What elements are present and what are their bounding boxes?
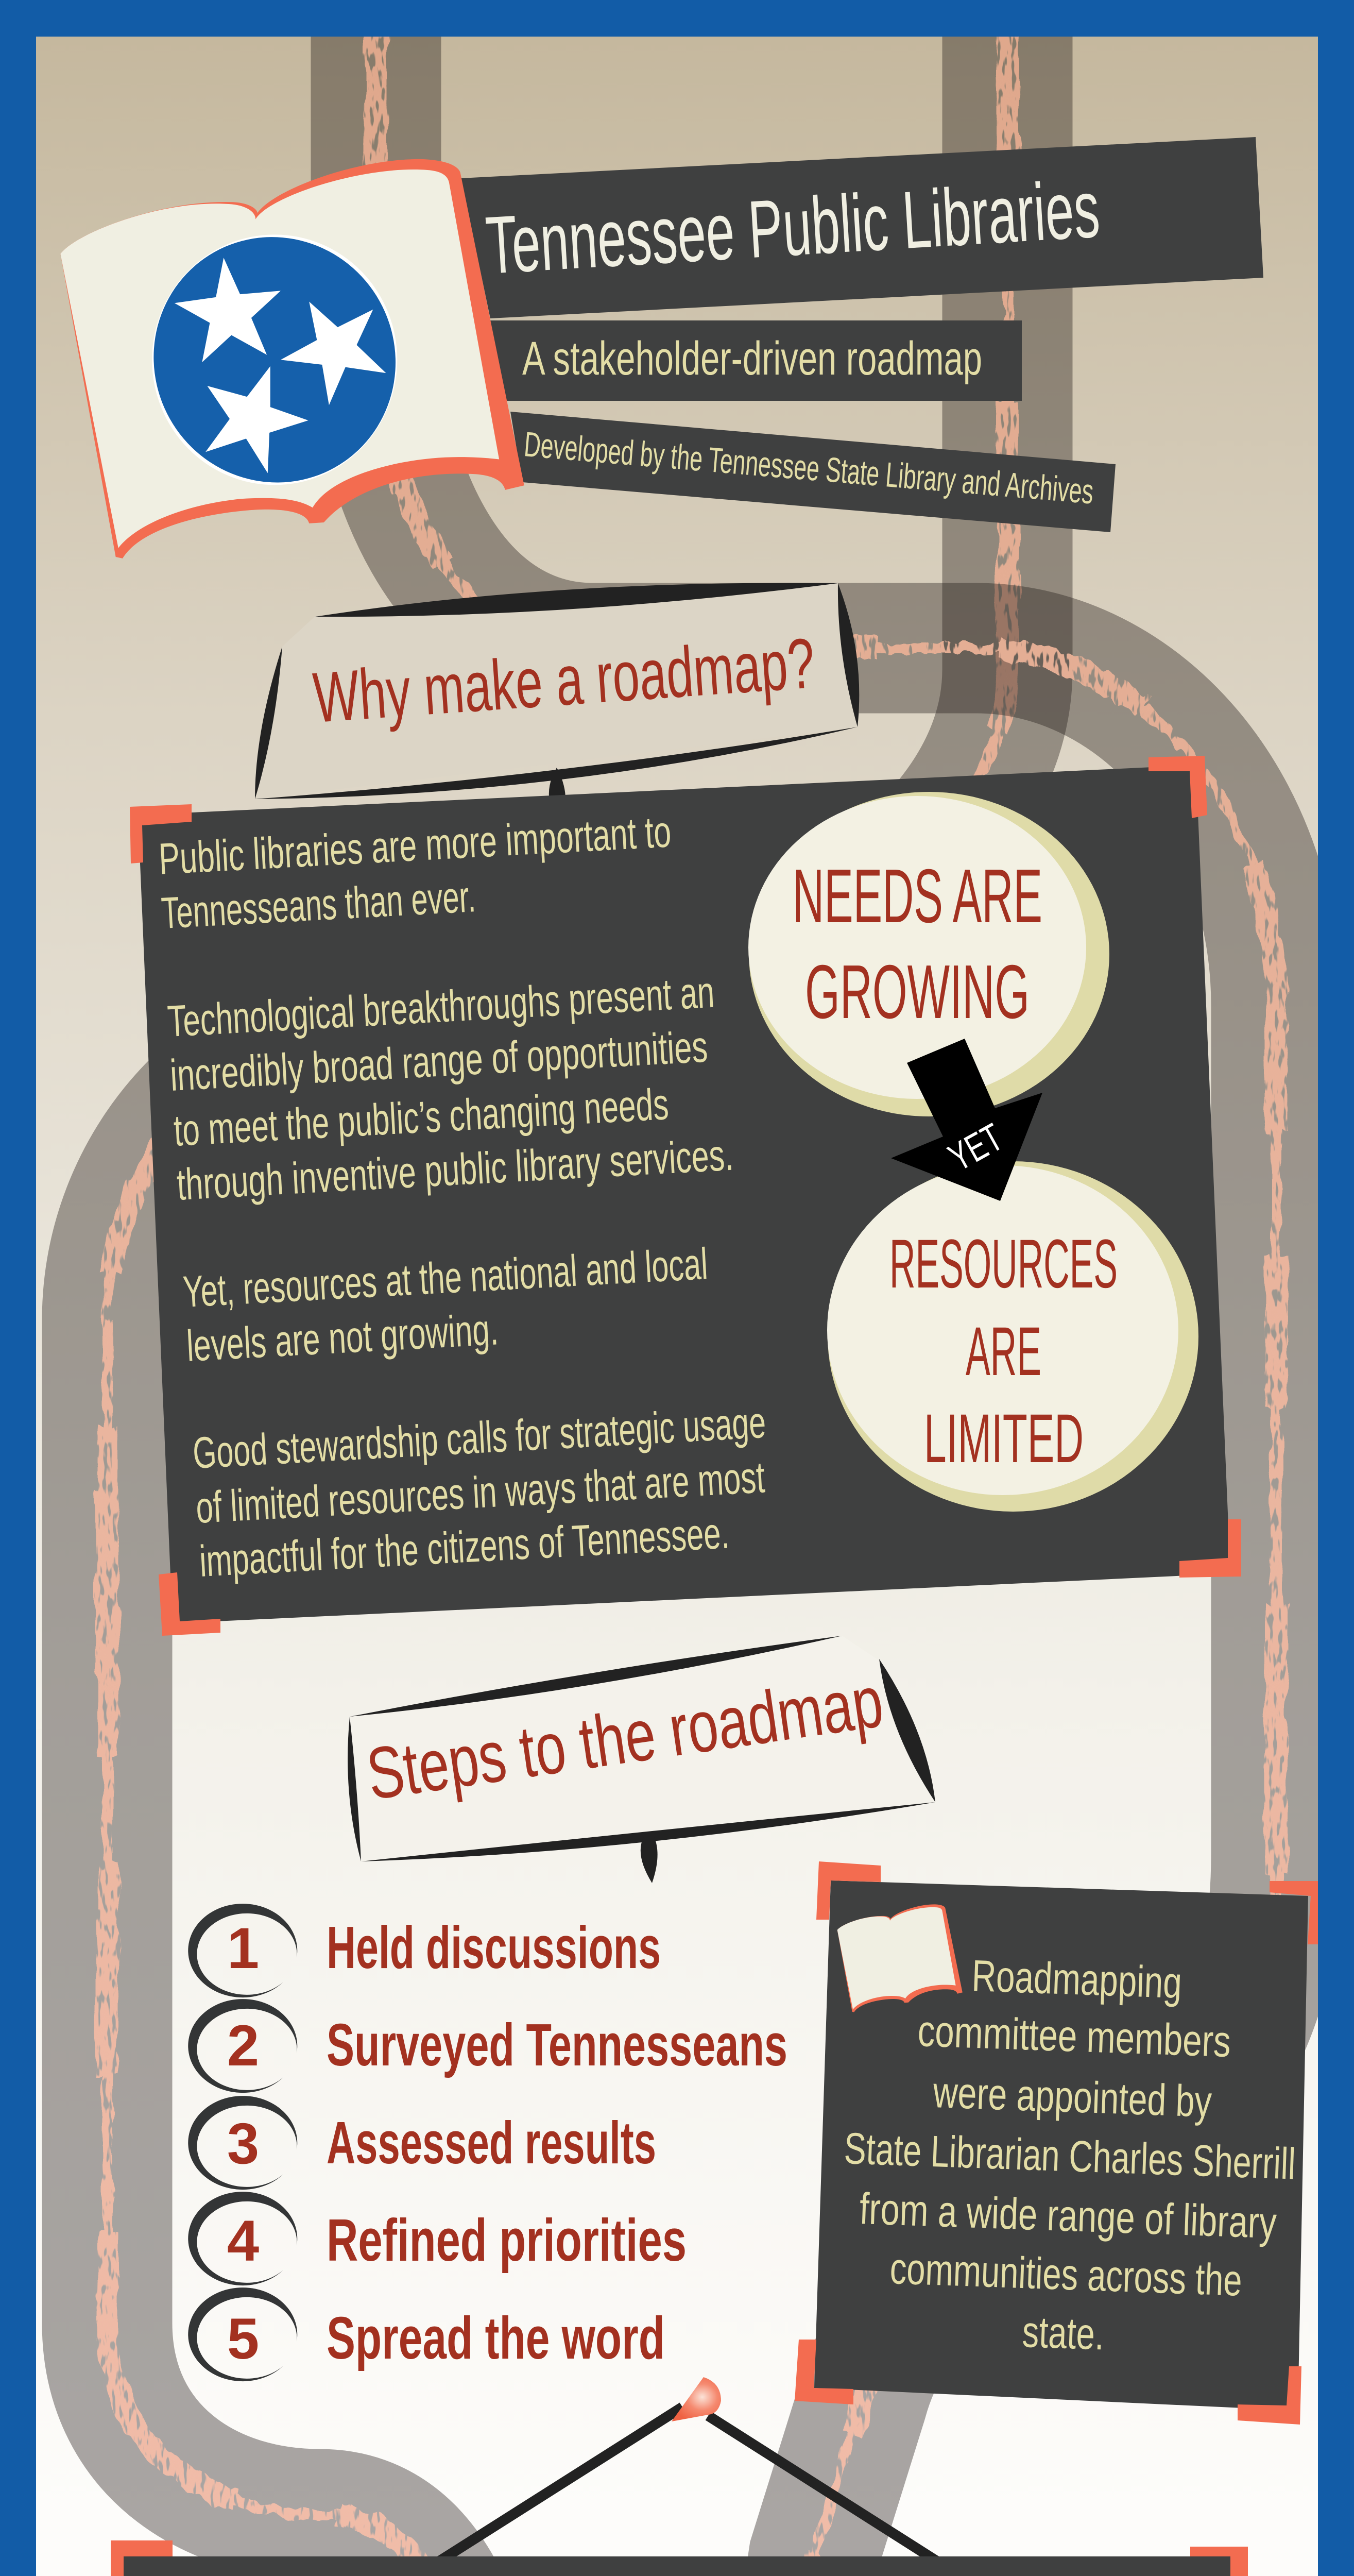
- hanger wires and pin: [436, 2377, 940, 2563]
- text block: reasons: [158, 807, 767, 1586]
- circle: needs are growing: NEEDS ARE: [793, 854, 1042, 939]
- circle: needs are growing: [748, 792, 1109, 1116]
- text block: reasons: of limited resources in ways that are most: [195, 1452, 766, 1533]
- banner: why make a roadmap: [255, 583, 859, 804]
- step 4: 4: [227, 2209, 259, 2273]
- text block: reasons: Yet, resources at the national and local: [182, 1239, 709, 1317]
- circle: resources are limited: RESOURCES: [889, 1226, 1118, 1302]
- text block: reasons: Tennesseans than ever.: [160, 872, 477, 938]
- step 5: [188, 2287, 665, 2381]
- arrow: yet: [891, 1039, 1042, 1201]
- text block: reasons: Good stewardship calls for strategic usage: [192, 1398, 767, 1478]
- step 5: 5: [227, 2307, 259, 2371]
- step 1: 1: [227, 1916, 259, 1980]
- step 2: Surveyed Tennesseans: [327, 2011, 787, 2078]
- title banner: [461, 137, 1263, 318]
- heading: Steps to the roadmap: [362, 1660, 888, 1816]
- step 3: 3: [227, 2111, 259, 2176]
- step 4: Refined priorities: [327, 2207, 687, 2274]
- step 3: [188, 2096, 656, 2190]
- text block: reasons: Technological breakthroughs present an: [166, 968, 715, 1046]
- text block: reasons: incredibly broad range of opportunities: [169, 1022, 709, 1100]
- circle: resources are limited: [827, 1161, 1198, 1512]
- developer credit banner: [510, 412, 1116, 532]
- text block: reasons: through inventive public library services.: [176, 1130, 734, 1210]
- subtitle banner: [490, 320, 1022, 401]
- text block: reasons: Public libraries are more important to: [158, 807, 673, 884]
- text block: committee: state.: [1021, 2307, 1105, 2360]
- circle: resources are limited: LIMITED: [924, 1400, 1084, 1477]
- step 4: [188, 2192, 687, 2285]
- step 1: Held discussions: [327, 1914, 661, 1981]
- circle: needs are growing: GROWING: [805, 950, 1030, 1035]
- text block: committee: committee members: [917, 2006, 1231, 2066]
- icon: small open book: [837, 1904, 963, 2012]
- text block: committee: Roadmapping: [971, 1951, 1182, 2008]
- text block: reasons: levels are not growing.: [185, 1304, 500, 1371]
- step 1: [188, 1904, 661, 1997]
- step 2: 2: [227, 2013, 259, 2078]
- subtitle: A stakeholder-driven roadmap: [522, 332, 982, 385]
- banner: steps to the roadmap: [348, 1636, 935, 1883]
- circle: resources are limited: ARE: [966, 1313, 1041, 1390]
- step 5: Spread the word: [327, 2304, 665, 2371]
- step 2: [188, 1999, 787, 2093]
- text block: reasons: to meet the public’s changing needs: [173, 1079, 670, 1156]
- heading: Why make a roadmap?: [311, 623, 817, 738]
- icon: open book with Tennessee tri-star: [60, 159, 524, 558]
- text block: committee: communities across the: [889, 2244, 1243, 2306]
- step 3: Assessed results: [327, 2109, 656, 2176]
- text block: committee: [843, 1951, 1296, 2360]
- arrow: yet: YET: [941, 1115, 1010, 1180]
- panel: why make a roadmap: [130, 756, 1241, 1636]
- panel: roadmapping committee: [795, 1861, 1318, 2425]
- text block: committee: were appointed by: [932, 2067, 1212, 2127]
- list: roadmap steps: [188, 1904, 787, 2381]
- panel: where we're going: [107, 2540, 1248, 2576]
- text block: reasons: impactful for the citizens of Tennessee.: [198, 1508, 731, 1586]
